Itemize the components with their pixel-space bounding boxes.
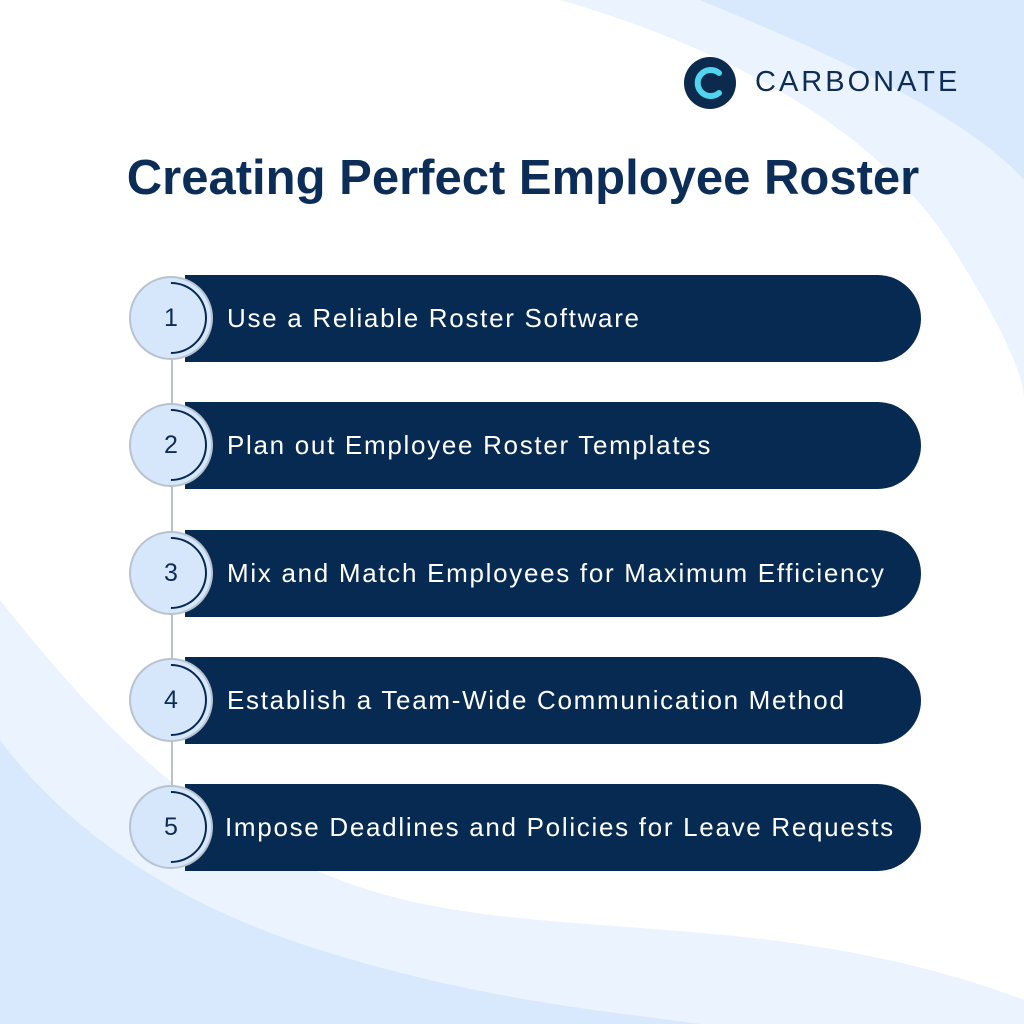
step 1 (129, 275, 921, 362)
step 5 (129, 784, 921, 871)
step 1: Use a Reliable Roster Software (227, 303, 641, 333)
step 3 (129, 530, 921, 617)
step 3: Mix and Match Employees for Maximum Efficiency (227, 558, 886, 588)
step 2: Plan out Employee Roster Templates (227, 430, 712, 460)
step 4 (129, 657, 921, 744)
step 3: 3 (164, 559, 178, 587)
step 5: 5 (164, 813, 178, 841)
brand name: CARBONATE (755, 66, 960, 98)
icon: logo C (684, 57, 736, 109)
logo (684, 57, 960, 109)
step 4: Establish a Team-Wide Communication Method (227, 685, 846, 715)
title: Creating Perfect Employee Roster (127, 151, 919, 205)
step 4: 4 (164, 686, 178, 714)
step 2: 2 (164, 431, 178, 459)
step 5: Impose Deadlines and Policies for Leave Requests (225, 812, 895, 842)
step 1: 1 (164, 304, 178, 332)
connector line (171, 320, 173, 830)
step 2 (129, 402, 921, 489)
